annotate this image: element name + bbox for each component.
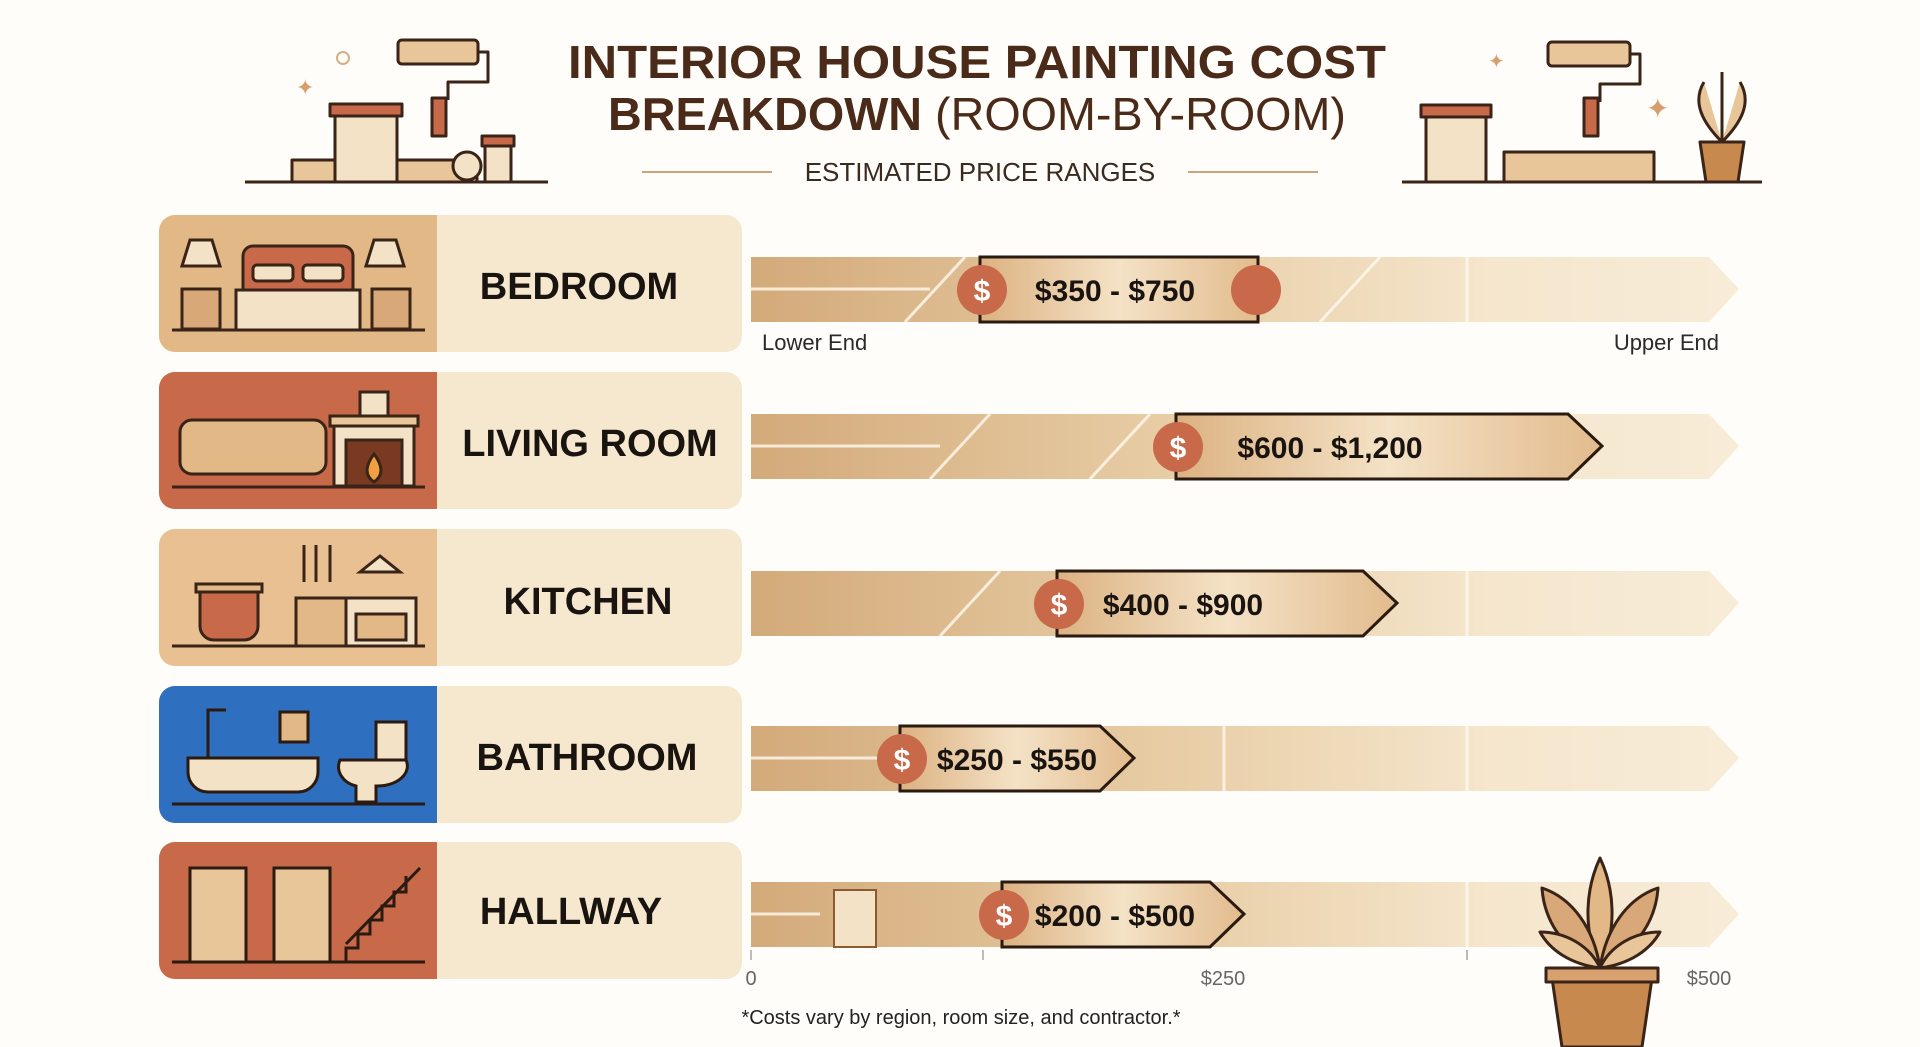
pill: $200 - $500: [979, 882, 1244, 947]
header illustration left: paint can, roller, tape: [245, 40, 548, 182]
header illustration right: paint can, roller, plank, plant: ✦: [1646, 93, 1669, 124]
bar: bedroom: Upper End: [1614, 330, 1719, 355]
panel: bedroom card: [159, 215, 742, 352]
label: living room: LIVING ROOM: [462, 423, 718, 465]
pill: $350 - $750: [957, 257, 1281, 322]
pill: $350 - $750: $350 - $750: [1035, 275, 1195, 308]
subtitle: ESTIMATED PRICE RANGES: [805, 157, 1155, 187]
pill: $350 - $750: $: [974, 275, 991, 308]
bar: hallway: [751, 882, 1739, 947]
footnote: *Costs vary by region, room size, and contractor.*: [741, 1007, 1181, 1029]
header illustration right: paint can, roller, plank, plant: ✦: [1488, 51, 1505, 73]
pill: $200 - $500: $: [996, 900, 1013, 933]
pill: $400 - $900: $400 - $900: [1103, 589, 1263, 622]
header illustration left: paint can, roller, tape: ✦: [296, 75, 314, 100]
pill: $250 - $550: $: [894, 744, 911, 777]
bar: bedroom: [751, 257, 1739, 355]
bar: living room: [751, 414, 1739, 479]
icon: bed with lamps: [172, 240, 425, 330]
pill: $400 - $900: [1034, 571, 1397, 636]
pill: $250 - $550: $250 - $550: [937, 744, 1097, 777]
axis labels: [745, 950, 1731, 990]
pill: $600 - $1,200: [1153, 414, 1602, 479]
bar: kitchen: [751, 571, 1739, 636]
axis labels: $250: [1201, 968, 1245, 990]
title: INTERIOR HOUSE PAINTING COST: [568, 36, 1386, 88]
bar: bedroom: Lower End: [762, 330, 867, 355]
label: kitchen: KITCHEN: [504, 581, 672, 623]
icon: potted plant: [1540, 858, 1660, 1047]
label: hallway: HALLWAY: [480, 891, 662, 933]
icon: bathtub and toilet: [172, 710, 425, 804]
panel: bathroom card: [159, 686, 742, 823]
panel: kitchen card: [159, 529, 742, 666]
title: [568, 36, 1386, 140]
panel: hallway card: [159, 842, 742, 979]
pill: $200 - $500: $200 - $500: [1035, 900, 1195, 933]
bar: bathroom: [751, 726, 1739, 791]
label: bedroom: BEDROOM: [480, 266, 678, 308]
icon: pot, utensils, stove: [172, 545, 425, 646]
axis labels: 0: [745, 968, 757, 990]
panel: living room card: [159, 372, 742, 509]
title: BREAKDOWN (ROOM-BY-ROOM): [608, 88, 1346, 140]
pill: $600 - $1,200: $600 - $1,200: [1237, 432, 1423, 465]
header illustration right: paint can, roller, plank, plant: [1402, 42, 1762, 182]
icon: doors and stairs: [172, 868, 425, 962]
pill: $250 - $550: [877, 726, 1134, 791]
pill: $400 - $900: $: [1051, 589, 1068, 622]
pill: $600 - $1,200: $: [1170, 432, 1187, 465]
label: bathroom: BATHROOM: [477, 737, 697, 779]
axis labels: $500: [1687, 968, 1731, 990]
icon: sofa and fireplace: [172, 392, 425, 487]
